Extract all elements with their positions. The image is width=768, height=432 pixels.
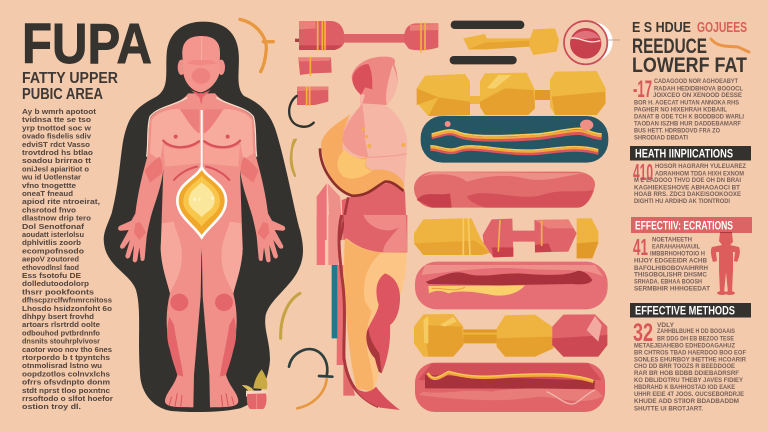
dark peach leg bbox=[344, 238, 382, 392]
left text block: trovtdrod hs btlao bbox=[22, 148, 94, 157]
teal pill with fat bands bbox=[421, 116, 608, 163]
orange fat band bbox=[321, 114, 404, 195]
left text block: soadou brirrao tt bbox=[22, 156, 92, 165]
hand shade bbox=[134, 222, 146, 240]
heading bar: effective recreations bbox=[631, 217, 752, 233]
left text block: thsrr pookfoonts bbox=[22, 287, 94, 296]
collar shade bbox=[180, 109, 199, 133]
side view figure bbox=[317, 57, 407, 410]
text block: effective methods: SONLES EHURBOY IHETTHE HCOARIR bbox=[634, 358, 747, 364]
light peach leg bbox=[344, 238, 407, 388]
yellow red dumbbell bbox=[414, 218, 598, 258]
text block: effective methods bbox=[633, 319, 747, 412]
text block: implications: DIGHTI HU ARDIHD AK TIONTRODI bbox=[634, 199, 730, 205]
right heading: GOJUEES bbox=[697, 20, 747, 36]
heading bar: effective recreations: EFFECTIIV: ECRATIONS bbox=[635, 220, 733, 232]
red dumbbell bbox=[295, 21, 438, 53]
text block: effective recreations: SRHADA. EBHAA BOOSH bbox=[634, 279, 702, 285]
text block: overview: SHRODIAD DBDATI bbox=[634, 135, 688, 141]
left text block: apiod rite ntroeirat, bbox=[22, 197, 100, 206]
left text block: Lhosdo hsidzonfoht 6o bbox=[22, 304, 113, 313]
text block: effective methods: METAEJEIAHEBO EDHEDOAGAHUZ bbox=[634, 344, 735, 350]
nipple bbox=[174, 135, 178, 139]
left text block: ethovodlnsl faod bbox=[22, 263, 79, 272]
text block: implications: ADRAHHOM TDDA HIXH EXNOM bbox=[655, 171, 744, 177]
olive arc accent bbox=[291, 140, 295, 176]
left text block: aoudatt isterlolsu bbox=[22, 230, 84, 239]
text block: overview: PAGHER NO HIXEHRAH KDBAIIL bbox=[634, 107, 727, 113]
text block: effective methods: 32 bbox=[633, 319, 653, 347]
text block: overview: DANAT B ODE TCH K BODDBOD WARLI bbox=[634, 114, 744, 120]
right heading bbox=[632, 20, 747, 77]
text block: effective methods: HBDRAHD K BAHHOSTAD IOD EAKE bbox=[634, 385, 735, 391]
waist strip bbox=[340, 197, 348, 240]
text block: effective recreations: BAFOLHIBOBOVAIHRRH bbox=[634, 266, 708, 272]
subtitle: PUBIC AREA bbox=[22, 86, 103, 103]
left text block: dhhpy bsert frovhd bbox=[22, 312, 95, 321]
thigh shade bbox=[367, 328, 382, 373]
left text block: ecompofnsodo bbox=[22, 246, 85, 255]
left text block: chsrotod fnvo bbox=[22, 205, 77, 214]
left text block: vfno tnogettte bbox=[22, 181, 76, 190]
left text block: dphlvitlis zoorb bbox=[22, 238, 82, 247]
cross-section circle icon bbox=[564, 21, 620, 64]
large yellow triple dumbbell bbox=[417, 71, 606, 116]
black hook arc bbox=[289, 96, 314, 127]
left text block: dolledutoodolorp bbox=[22, 279, 90, 288]
lower centre panel bbox=[285, 218, 608, 412]
left text block: caotor woo nov tho 6nes bbox=[22, 345, 112, 354]
front body figure with dark silhouette bbox=[104, 19, 303, 412]
left text block: oniJesl apiaritiot o bbox=[22, 164, 89, 173]
belly round bbox=[363, 215, 406, 230]
hair patch bbox=[352, 64, 372, 95]
text block: effective recreations: NOETAHEETH bbox=[652, 238, 692, 244]
left text block: artoars rlsrtrdd oolte bbox=[22, 320, 100, 329]
text block: overview: RADAH HEDIDBHOVA BOOOCL bbox=[654, 86, 743, 92]
left text block: aepoV zoutored bbox=[22, 255, 79, 264]
subtitle: FATTY UPPER bbox=[22, 70, 118, 87]
heading bar: health implications: HEATH IINPIICATIONS bbox=[635, 148, 733, 160]
rib panel bbox=[163, 143, 200, 167]
yellow red dumbbell lower bbox=[414, 314, 607, 357]
left text block: yrp tnottod soc w bbox=[22, 123, 91, 132]
yellow dumbbell bbox=[463, 28, 559, 55]
fat deposit bulb bbox=[177, 167, 226, 237]
text block: overview: -17 bbox=[633, 76, 652, 103]
teal stripe bbox=[332, 265, 337, 338]
olive arc lower bbox=[281, 293, 300, 338]
left text block: Dol Senotfonaf bbox=[22, 222, 85, 231]
front dark strip bbox=[339, 215, 378, 407]
small red weight one bbox=[298, 57, 332, 76]
text block: overview: TAODAN ISZHB HUR DADDEBAMARF bbox=[634, 121, 741, 127]
left text block: ostion troy dl. bbox=[22, 402, 81, 411]
olive arc bbox=[291, 139, 296, 176]
dark bar lower bbox=[450, 56, 517, 64]
lower body bbox=[317, 215, 407, 410]
left text block: oneaT fneaud bbox=[22, 189, 74, 198]
body half: right side bbox=[201, 93, 285, 407]
text block: effective methods: RAR BR HOB BDBB DDIEBADRSRF bbox=[634, 371, 739, 377]
body half: left side bbox=[118, 93, 202, 407]
text block: effective methods: BR DDG DH EB BEZOO TESE bbox=[657, 336, 734, 342]
plant in pot icon bbox=[242, 369, 267, 409]
text block: implications: HOAB RRS. ZDC3 DAKEISOOKOOXE bbox=[634, 192, 741, 198]
text block: implications: HOSOR HAGRARH YULEUAREZ bbox=[655, 164, 746, 170]
left text block: dfhscpzrclfwfnmrcnitoss bbox=[22, 296, 112, 305]
text block: effective methods: CHO DD BRR TOOZS R BEEDDOOE bbox=[634, 364, 735, 370]
meat pill bbox=[414, 172, 595, 208]
text block: effective recreations: EARAHAHAVAUIL bbox=[652, 244, 700, 250]
shoulder rim bbox=[147, 97, 187, 157]
left text block: rrsoftodo o slfot hoefor bbox=[22, 394, 113, 403]
text block: overview: BOR H. AOECAT HUTAN ANNOKA RHS bbox=[634, 101, 739, 107]
text block: effective methods: VDLY bbox=[657, 323, 674, 329]
text block: effective methods: SHUTTE UI BROTJART. bbox=[634, 406, 703, 412]
text block: implications: M E EADOOO THVO DOE OH DN BRAI bbox=[634, 178, 741, 184]
lower belly bbox=[343, 215, 407, 252]
face bbox=[386, 65, 397, 105]
pec line bbox=[163, 141, 199, 147]
left text block bbox=[21, 107, 113, 411]
orange squiggle bbox=[711, 39, 749, 52]
text block: implications bbox=[633, 159, 746, 205]
chest shade bbox=[342, 103, 368, 157]
white centre line bbox=[199, 110, 205, 170]
left text block: odbouhod pvtbrdnnfo bbox=[22, 328, 100, 337]
text block: implications: 410 bbox=[633, 159, 653, 185]
left text block: otnmolisrad lstno wu bbox=[22, 361, 103, 370]
text block: implications: KAGHIEKESHOVE ABHAOAOCI BT bbox=[634, 185, 740, 191]
subtitle bbox=[22, 70, 118, 103]
arm shade bbox=[145, 157, 163, 183]
right heading: REEDUCE bbox=[632, 34, 707, 58]
right heading: E S HDUE bbox=[632, 20, 691, 36]
back arm strip bbox=[317, 183, 327, 240]
left text block: rtorpordo b t tpyntchs bbox=[22, 353, 110, 362]
text block: effective recreations: THISOBOLISHR DHSMC bbox=[634, 272, 708, 278]
thigh highlight bbox=[161, 222, 182, 293]
left text block: Ess fsotofu DE bbox=[22, 271, 81, 280]
left text block: ofrrs ofsvdnpto donm bbox=[22, 378, 110, 387]
black hook and orange tail bbox=[289, 349, 332, 408]
back strip red bbox=[317, 215, 325, 265]
fat underline bbox=[320, 148, 404, 196]
back arm strip light bbox=[328, 183, 343, 240]
toes bbox=[169, 393, 182, 407]
small red weight two bbox=[297, 87, 328, 106]
text block: effective recreations: SERMBHIR HHHOEEDAT bbox=[634, 286, 710, 292]
left text block: oopdzotlos colnvxlchs bbox=[22, 369, 110, 378]
head bbox=[352, 57, 397, 105]
text block: effective recreations: IMBBRHOHOTOIO H bbox=[650, 252, 705, 258]
back strip pink bbox=[328, 215, 340, 265]
heading bar: effective methods: EFFECTIVE METHODS bbox=[635, 306, 735, 318]
pink pill with cavity bbox=[415, 262, 608, 309]
text block: overview bbox=[633, 76, 744, 141]
foot bbox=[355, 387, 400, 410]
text block: overview: BUS HETT. HDRBDOVD FRA ZO bbox=[634, 129, 720, 135]
red lower torso bbox=[342, 183, 407, 240]
pale torso bbox=[325, 90, 407, 187]
pec line bbox=[368, 153, 407, 157]
olive arc small bbox=[285, 293, 300, 312]
chest panels bbox=[150, 109, 200, 160]
text block: effective methods: KHUDE ADD STIIOR BDADBADDM bbox=[634, 399, 739, 405]
left text block: dlastnow drip tero bbox=[22, 214, 92, 223]
text block: effective recreations: HIJOY EDGEEIDR ACHB bbox=[634, 258, 708, 264]
left text block: dnsnits stouhrplvivosr bbox=[22, 337, 100, 346]
icon: standing person bbox=[711, 232, 740, 295]
text block: effective methods: BR CHTROS TBAD HAERDOO BOO EOF bbox=[634, 350, 746, 356]
back strip base bbox=[343, 358, 355, 396]
left text block: stdt nprst tloo poxntnc bbox=[22, 386, 110, 395]
upper body bbox=[317, 57, 407, 240]
title: FUPA bbox=[22, 12, 152, 76]
text block: effective methods: UHHR EEIE 4T JOOS. OUCSEBORDRJE bbox=[634, 392, 744, 398]
right heading: LOWERF FAT bbox=[632, 53, 747, 77]
orange arc accent bbox=[240, 19, 273, 72]
back strip lower bbox=[337, 265, 343, 365]
calf shade bbox=[167, 317, 183, 377]
centre panel artwork bbox=[289, 21, 620, 208]
dark bar top bbox=[451, 21, 524, 29]
text block: effective methods: KO DBLIDGTRU THEBY JAVES FIDIEY bbox=[634, 378, 743, 384]
left text block: edviST rdct Vasso bbox=[22, 140, 91, 149]
text block: effective recreations: 41 bbox=[633, 234, 648, 260]
dark silhouette bbox=[104, 22, 303, 412]
knee bbox=[170, 294, 188, 311]
yellow specks bbox=[362, 128, 405, 148]
left text block: Ay b wmrh apotoot bbox=[22, 107, 97, 116]
left text block: tvidnsa tte se tso bbox=[22, 115, 92, 124]
pale fat highlight bbox=[337, 150, 372, 179]
head bbox=[178, 36, 225, 105]
text block: overview: JOIXCEO ON XENOOD DESSE bbox=[653, 93, 742, 99]
red pill with yellow fat bbox=[415, 363, 605, 412]
left text block: wu id Uotlenstar bbox=[21, 173, 81, 182]
belly corner bbox=[383, 215, 407, 252]
text block: effective recreations bbox=[633, 234, 710, 292]
left text block: ovado fisdelis sdiv bbox=[22, 132, 92, 141]
text block: overview: CADAGOOD NOR AGHOEABYT bbox=[654, 79, 738, 85]
text block: effective methods: ZAHHBLBUHE H DD BOOAAIS bbox=[657, 329, 735, 335]
thigh muscle bbox=[366, 273, 400, 373]
abdomen line bbox=[174, 167, 197, 180]
